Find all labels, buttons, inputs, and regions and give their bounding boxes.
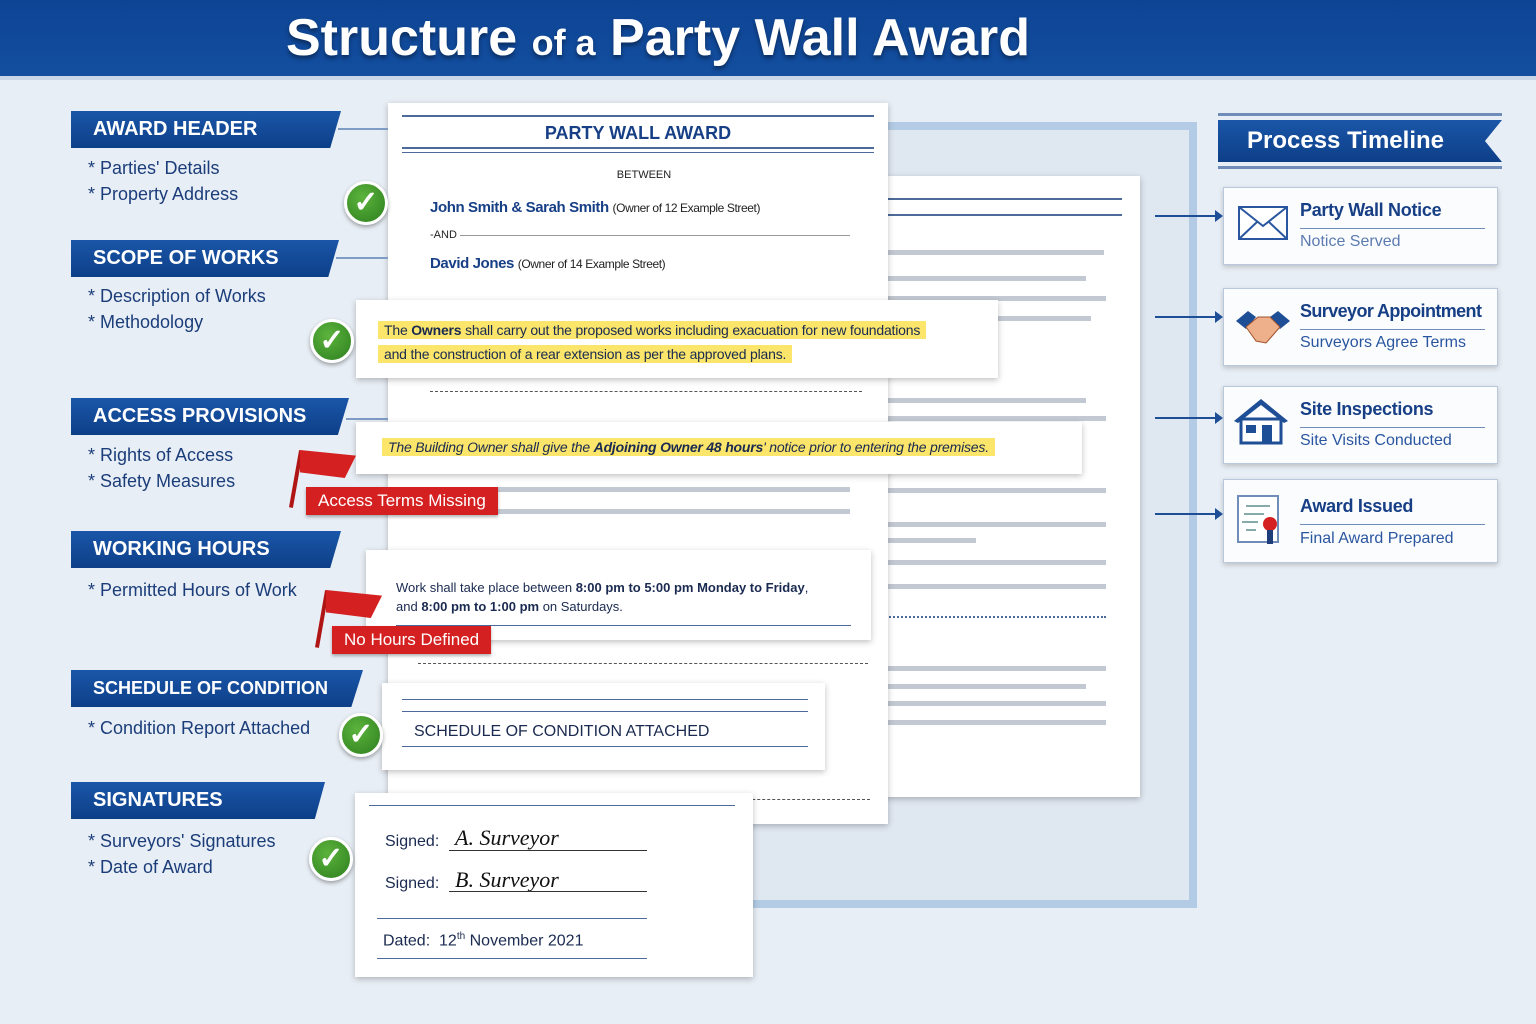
timeline: award issued: Award Issued <box>1300 496 1413 516</box>
flag: access terms missing: Access Terms Missing <box>318 491 486 510</box>
title: Structure of a Party Wall Award <box>286 9 1030 67</box>
timeline: award issued: Final Award Prepared <box>1300 530 1454 547</box>
timeline: party wall notice <box>1223 187 1498 265</box>
section: access provisions <box>71 398 349 435</box>
text: * Condition Report Attached <box>88 718 310 738</box>
text: ✓ <box>319 324 345 357</box>
callout: hours <box>366 550 871 640</box>
callout: signatures: A. Surveyor <box>455 825 559 850</box>
text: * Parties' Details <box>88 158 219 178</box>
timeline heading: Process Timeline <box>1247 127 1444 154</box>
timeline: site inspections <box>1223 386 1498 464</box>
section: scope of works: SCOPE OF WORKS <box>93 247 279 269</box>
text: ✓ <box>348 718 374 751</box>
text: * Property Address <box>88 184 238 204</box>
flag: no hours defined <box>315 590 493 658</box>
callout: signatures: Dated: 12th November 2021 <box>383 931 583 949</box>
timeline: party wall notice: Notice Served <box>1300 233 1400 250</box>
text: ✓ <box>353 186 379 219</box>
timeline: party wall notice: Party Wall Notice <box>1300 200 1441 220</box>
main document: PARTY WALL AWARD <box>545 123 731 143</box>
section: schedule of condition: SCHEDULE OF CONDITION <box>93 678 328 698</box>
callout: scope: and the construction of a rear extension as per the approved plans. <box>384 346 786 362</box>
timeline: site inspections: Site Inspections <box>1300 399 1433 419</box>
text: * Description of Works <box>88 286 266 306</box>
callout: scope: The Owners shall carry out the proposed works including exacuation for new foundations <box>384 322 920 338</box>
main document: John Smith & Sarah Smith (Owner of 12 Example Street) <box>430 199 760 216</box>
callout: scope <box>356 300 998 378</box>
back frame <box>745 122 1197 908</box>
callout: schedule <box>382 683 825 770</box>
section: award header: AWARD HEADER <box>93 118 257 140</box>
callout: hours: and 8:00 pm to 1:00 pm on Saturdays. <box>396 599 623 614</box>
text: * Safety Measures <box>88 471 235 491</box>
section: working hours <box>71 531 341 568</box>
main document: BETWEEN <box>617 169 671 181</box>
section: schedule of condition <box>71 670 363 707</box>
timeline: surveyor appointment: Surveyors Agree Terms <box>1300 334 1466 351</box>
section: award header <box>71 111 341 148</box>
text: * Rights of Access <box>88 445 233 465</box>
text: * Methodology <box>88 312 203 332</box>
callout: signatures: Signed: <box>385 833 439 850</box>
header banner <box>0 0 1536 80</box>
text: * Permitted Hours of Work <box>88 580 297 600</box>
text: ✓ <box>318 842 344 875</box>
main document: -AND <box>430 229 457 241</box>
timeline: surveyor appointment: Surveyor Appointment <box>1300 301 1481 321</box>
timeline heading <box>1218 113 1502 169</box>
callout: hours: Work shall take place between 8:00 pm to 5:00 pm Monday to Friday, <box>396 580 808 595</box>
callout: schedule: SCHEDULE OF CONDITION ATTACHED <box>414 723 709 740</box>
second page <box>886 176 1140 797</box>
flag: access terms missing <box>289 450 500 519</box>
callout: signatures: Signed: <box>385 875 439 892</box>
main document <box>388 103 888 824</box>
section: scope of works <box>71 240 339 277</box>
flag: no hours defined: No Hours Defined <box>344 630 479 649</box>
section: working hours: WORKING HOURS <box>93 538 270 560</box>
callout: access <box>356 422 1082 474</box>
text: * Date of Award <box>88 857 213 877</box>
callout: signatures <box>355 793 753 977</box>
callout: signatures: B. Surveyor <box>455 867 559 892</box>
section: signatures: SIGNATURES <box>93 789 223 811</box>
section: signatures <box>71 782 325 819</box>
main document: David Jones (Owner of 14 Example Street) <box>430 255 665 272</box>
callout: access: The Building Owner shall give the Adjoining Owner 48 hours' notice prior to entering the premises. <box>388 439 989 455</box>
timeline: surveyor appointment <box>1223 288 1498 366</box>
text: * Surveyors' Signatures <box>88 831 276 851</box>
timeline: award issued <box>1223 479 1498 563</box>
section: access provisions: ACCESS PROVISIONS <box>93 405 306 427</box>
timeline: site inspections: Site Visits Conducted <box>1300 432 1452 449</box>
